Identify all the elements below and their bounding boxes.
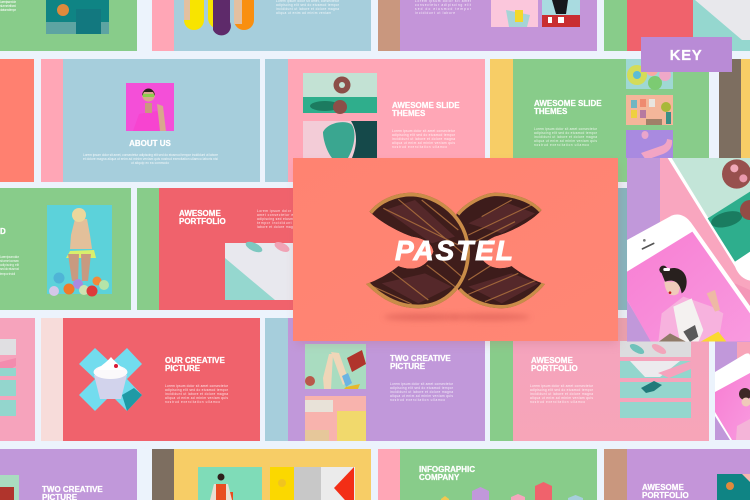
- heading: PICTURE: [165, 364, 201, 373]
- heading: [392, 101, 460, 118]
- title: pastel: PASTEL: [395, 235, 513, 266]
- panel: green photo slide: D: [0, 227, 6, 236]
- text block: Lorem ipsum dolor sit amet consectetur: [392, 129, 456, 133]
- text block: amet consectetur elit: [257, 213, 297, 217]
- woman in pink cardigan: [658, 266, 727, 342]
- text block: nostrud exercitation ullamco: [530, 400, 585, 404]
- heading: [419, 465, 475, 482]
- heading: OUR CREATIVE: [165, 356, 226, 365]
- panel: green photo slide: sed do eiusmod: [0, 267, 19, 271]
- text block: aliqua ut enim ad minim veniam quis: [392, 141, 455, 145]
- text block: et dolore magna aliqua ut enim ad minim veniam quis nostrud exercitation ullamco laboris nisi: [83, 157, 218, 161]
- heading: PICTURE: [390, 362, 426, 371]
- strips between coral cover and phones: [618, 158, 627, 341]
- text block: Lorem ipsum dolor sit amet consectetur: [534, 127, 598, 131]
- heading: THEMES: [534, 107, 568, 116]
- heading: AWESOME SLIDE: [534, 99, 602, 108]
- heading: [534, 99, 602, 116]
- panel: green photo slide: [0, 188, 131, 310]
- badge: key: KEY: [670, 47, 702, 64]
- heading: INFOGRAPHIC: [419, 465, 475, 474]
- text block: Lorem ipsum dolor sit amet, consectetur adipiscing elit sed do eiusmod tempor incididunt ut labore: [83, 153, 218, 157]
- panel: top row blue slide with legs: [152, 0, 371, 51]
- chart: pentagon bars: [441, 482, 583, 500]
- right donut half: [453, 193, 545, 308]
- text block: incididunt ut labore et dolore magna: [392, 137, 455, 141]
- panel: awesome portfolio pink slide: [490, 318, 709, 441]
- text block: tempor incididunt ut: [257, 221, 297, 225]
- text block: Lorem ipsum dolor sit: [257, 209, 297, 213]
- text block: aliqua ut enim ad minim veniam quis: [530, 396, 593, 400]
- panel: pink bars slide: [0, 318, 35, 441]
- heading: AWESOME: [179, 209, 221, 218]
- text block: adipiscing elit sed do eiusmod tempor: [530, 388, 594, 392]
- photo: monstera leaf: [303, 121, 377, 158]
- text block: adipiscing elit sed do eiusmod tempor: [165, 388, 229, 392]
- icon: cupcake on blue x: [79, 348, 142, 411]
- text block: adipiscing elit sed do eiusmod tempor: [390, 386, 454, 390]
- text block: [390, 382, 454, 402]
- panel: green photo slide: tempor incidi: [0, 272, 15, 276]
- left donut half: [366, 193, 470, 308]
- panel: phone mockups: [627, 158, 750, 342]
- text block: incididunt ut labore et dolore magna: [165, 392, 228, 396]
- panel: top row blue slide with legs: adipiscing elit sed do eiusmod tempor: [276, 3, 340, 7]
- panel: bottom row purple portfolio slide: [604, 449, 750, 500]
- panel: top row purple slide: sed do eiusmod tempor: [415, 7, 472, 11]
- photo: pink room: [305, 396, 366, 441]
- panel: bottom row purple slide: [0, 449, 137, 500]
- photo: blonde woman with balloons: [47, 205, 112, 296]
- panel: brown and yellow slide edge: [719, 59, 750, 182]
- text block: aliqua ut enim ad minim veniam quis: [534, 139, 597, 143]
- photo: popsicles: [225, 240, 295, 300]
- panel: coral slide edge: [0, 59, 34, 182]
- badge: key: [641, 37, 732, 72]
- heading: [179, 209, 226, 226]
- text block: [83, 153, 218, 165]
- panel: top row purple slide: [378, 0, 597, 51]
- panel: green photo slide: adipiscing elit: [0, 263, 19, 267]
- text block: Lorem ipsum dolor sit amet consectetur: [165, 384, 229, 388]
- photo: pink telephone: [626, 130, 673, 160]
- panel: bottom row yellow slide: [152, 449, 371, 500]
- panel: coral cover card: [293, 158, 618, 344]
- text block: [530, 384, 594, 404]
- panel: top row red slide: [604, 0, 750, 51]
- text block: [392, 129, 456, 149]
- text block: incididunt ut labore et dolore magna: [390, 390, 453, 394]
- text block: [165, 384, 229, 404]
- text block: labore et dolore magna: [257, 225, 297, 229]
- panel: top row green slide: Lorem ipsum dolor: [0, 0, 17, 4]
- heading: PORTFOLIO: [531, 364, 578, 373]
- panel: green photo slide: Lorem ipsum dolor: [0, 255, 20, 259]
- photo: donuts on mint: [303, 73, 377, 114]
- photo: legs and tv: [305, 344, 366, 389]
- panel: bottom row purple portfolio slide: PORTFOLIO: [642, 491, 689, 500]
- panel: top row green slide: do eiusmod tempor: [0, 8, 17, 12]
- heading: [531, 356, 578, 373]
- panel: infographic company slide: [378, 449, 597, 500]
- text block: adipiscing elit sed do eiusmod tempor: [392, 133, 456, 137]
- photo: woman on magenta: [126, 83, 174, 131]
- heading: AWESOME: [531, 356, 573, 365]
- panel: top row purple slide: consectetur adipiscing elit: [415, 3, 471, 7]
- text block: Lorem ipsum dolor sit amet consectetur: [530, 384, 594, 388]
- text block: incididunt ut labore et dolore magna: [534, 135, 597, 139]
- panel: about us slide: [41, 59, 260, 182]
- text block: adipiscing sed eiusmod: [257, 217, 297, 221]
- panel: our creative picture slide: [41, 318, 260, 441]
- photo: donut pattern: [626, 59, 673, 90]
- icon: donut shadow: [384, 314, 530, 320]
- text block: nostrud exercitation ullamco: [392, 145, 447, 149]
- text block: aliqua ut enim ad minim veniam quis: [165, 396, 228, 400]
- illustration: chocolate donut halves: [366, 193, 545, 308]
- panel: top row blue slide with legs: aliqua ut enim ad minim veniam: [276, 11, 331, 15]
- panel: top row green slide: sit amet elit sed: [0, 4, 16, 8]
- heading: AWESOME SLIDE: [392, 101, 460, 110]
- panel: awesome slide themes green: [490, 59, 709, 182]
- text block: aliqua ut enim ad minim veniam quis: [390, 394, 453, 398]
- panel: awesome portfolio red slide: [137, 188, 299, 310]
- heading: COMPANY: [419, 473, 460, 482]
- phone: front with woman: [627, 214, 750, 342]
- heading: TWO CREATIVE: [390, 354, 451, 363]
- panel: bottom row purple slide: TWO CREATIVE: [42, 485, 103, 494]
- text block: adipiscing elit sed do eiusmod tempor: [534, 131, 598, 135]
- heading: [390, 354, 451, 371]
- photo strips: popsicle: [620, 341, 691, 418]
- panel: awesome slide themes pink: [265, 59, 485, 182]
- panel: bottom row purple portfolio slide: AWESOME: [642, 483, 684, 492]
- heading: [165, 356, 226, 373]
- text block: Lorem ipsum dolor sit amet consectetur: [390, 382, 454, 386]
- text block: ut aliquip ex ea commodo: [131, 161, 169, 165]
- text block: [257, 209, 297, 229]
- heading: PORTFOLIO: [179, 217, 226, 226]
- panel: right phone slide: [715, 318, 750, 440]
- panel: top row green slide: [0, 0, 137, 51]
- panel: top row blue slide with legs: incididunt ut labore et dolore magna: [276, 7, 339, 11]
- heading: THEMES: [392, 109, 426, 118]
- photo: pink wall: [626, 95, 673, 125]
- phone: rear with donuts: [668, 158, 750, 281]
- text block: nostrud exercitation ullamco: [390, 398, 445, 402]
- heading: about us: ABOUT US: [129, 139, 172, 148]
- text block: incididunt ut labore et dolore magna: [530, 392, 593, 396]
- text block: [534, 127, 598, 147]
- panel: top row purple slide: incididunt ut labore: [415, 11, 455, 15]
- text block: nostrud exercitation ullamco: [165, 400, 220, 404]
- text block: nostrud exercitation ullamco: [534, 143, 589, 147]
- panel: green photo slide: sit amet consec: [0, 259, 19, 263]
- panel: two creative picture slide: [265, 318, 485, 441]
